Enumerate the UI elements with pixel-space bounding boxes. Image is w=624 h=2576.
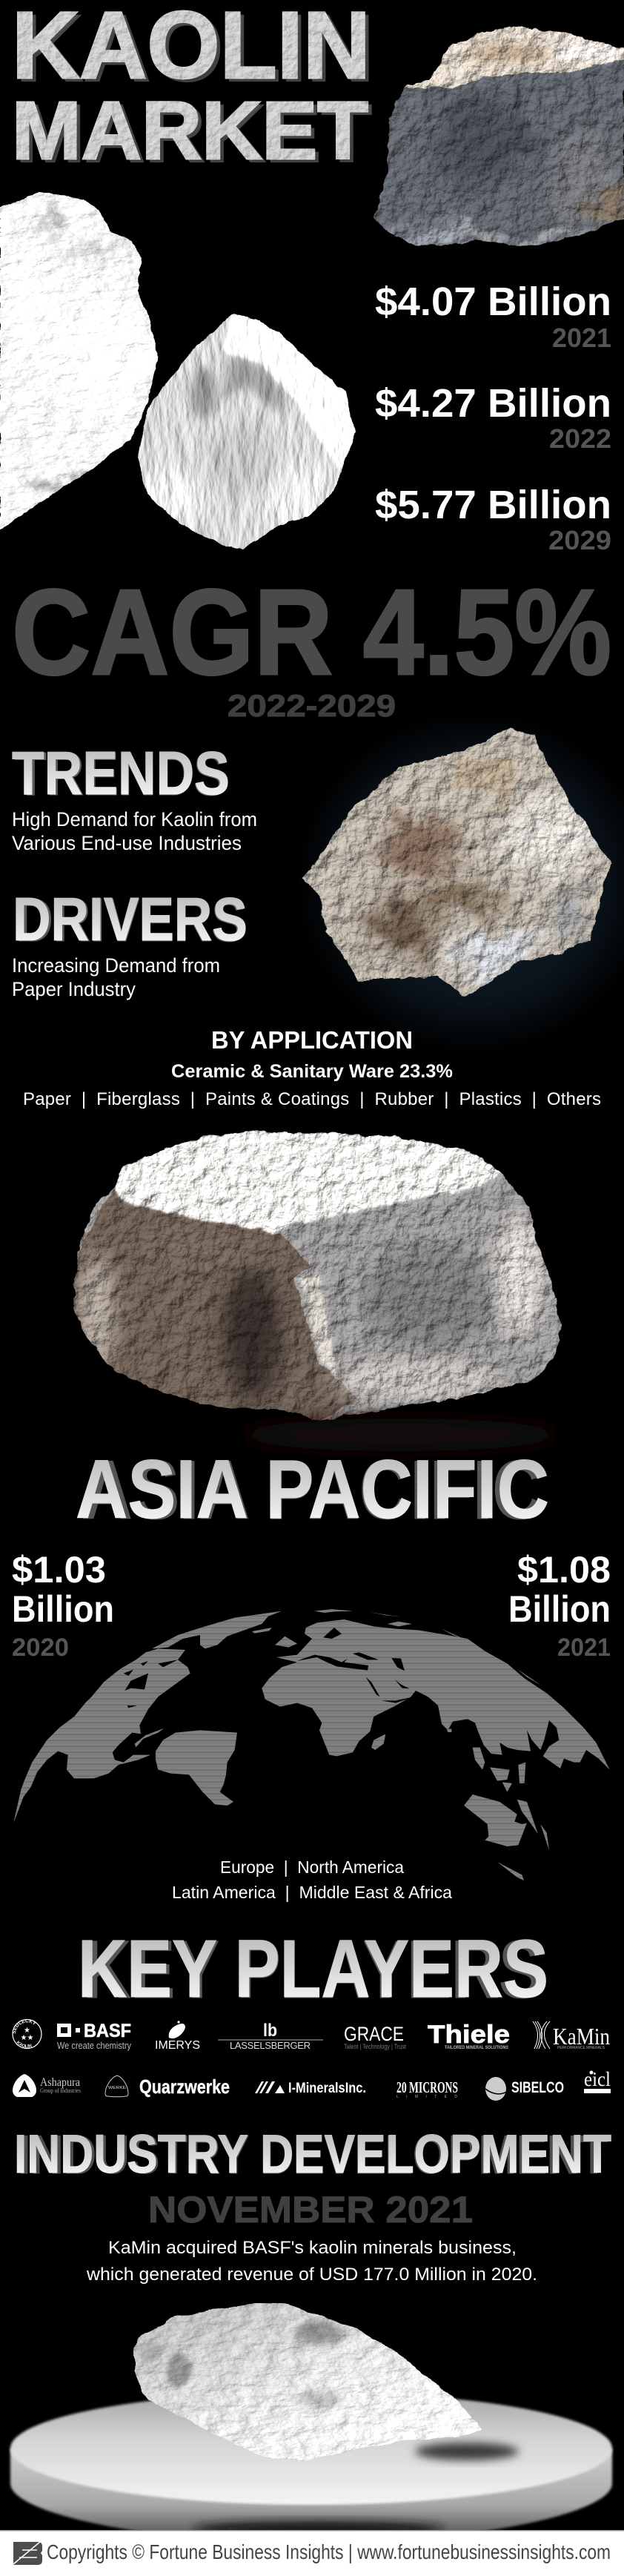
logo: Sedlecky Kaolin: [12, 2018, 42, 2050]
logo: Lasselsberger: [218, 2021, 323, 2051]
Madagascar: [371, 1734, 385, 1750]
drivers text: Increasing Demand from: [12, 954, 220, 977]
Eurasia and Africa: [262, 1619, 610, 1770]
panel: drivers: [12, 885, 248, 1000]
value 2021: [375, 280, 611, 353]
value 2029: 2029: [548, 525, 611, 555]
other regions: [172, 1857, 452, 1902]
panel: by application: [23, 1026, 601, 1109]
Iceland: [252, 1628, 272, 1634]
island chain: [480, 1770, 525, 1814]
image: plate pedestal: [10, 2392, 612, 2543]
image: large white chalk rock: [0, 189, 163, 538]
drivers heading: DRIVERS: [16, 885, 246, 954]
logo: Sedlecky Kaolin: KAOLIN: [16, 2041, 32, 2048]
logo: Ashapura: [13, 2074, 81, 2097]
logo: Quarzwerke: [105, 2075, 230, 2098]
drivers text: Paper Industry: [12, 978, 136, 1000]
region value 2021: 2021: [557, 1634, 611, 1662]
region value 2021: $1.08: [517, 1549, 611, 1591]
value 2029: $5.77 Billion: [375, 483, 611, 527]
other regions: Latin America | Middle East & Africa: [172, 1883, 452, 1902]
trends heading: TRENDS: [12, 739, 230, 808]
logo: Lasselsberger: LASSELSBERGER: [230, 2040, 311, 2051]
British Isles: [275, 1637, 297, 1648]
region heading: Asia Pacific: ASIA PACIFIC: [76, 1443, 549, 1536]
region value 2020: $1.03: [12, 1549, 106, 1591]
logo: 20 Microns: LIMITED: [396, 2095, 457, 2099]
application heading: BY APPLICATION: [211, 1026, 413, 1054]
map east: Eurasia, Africa and Australia: [262, 1609, 610, 1880]
Borneo: [490, 1767, 510, 1781]
value 2021: $4.07 Billion: [375, 280, 611, 324]
logo: I-Minerals: I-MineralsInc.: [288, 2081, 366, 2096]
logo: Sedlecky Kaolin: ★★: [21, 2034, 33, 2042]
South America: [156, 1730, 237, 1806]
logo: Grace: Talent | Technology | Trust: [344, 2043, 406, 2050]
region value 2020: 2020: [12, 1634, 69, 1662]
image: beige kaolin rock: [296, 723, 615, 1001]
logos: key players: [12, 2018, 611, 2101]
image: kaolin rock on pedestal: [133, 2303, 482, 2460]
value 2022: [375, 381, 611, 454]
logo: BASF: We create chemistry: [57, 2040, 131, 2051]
Greenland: [152, 1611, 282, 1648]
Sumatra: [473, 1748, 485, 1770]
value 2022: 2022: [549, 423, 611, 454]
drivers text: [12, 954, 220, 1000]
logo: 20 Microns: [396, 2078, 458, 2099]
development date: NOVEMBER 2021: [148, 2189, 473, 2230]
Sulawesi: [518, 1763, 525, 1783]
logo: Sedlecky Kaolin: SEDLECKY: [12, 2019, 37, 2034]
region value 2021: Billion: [508, 1588, 611, 1630]
logo: Ashapura: Group of Industries: [40, 2087, 81, 2094]
logo: KaMin: PERFORMANCE MINERALS: [557, 2046, 605, 2050]
development description: KaMin acquired BASF's kaolin minerals business,: [108, 2238, 517, 2258]
logo: Sibelco: SIBELCO: [511, 2079, 564, 2096]
trends text: Various End-use Industries: [12, 832, 242, 854]
logo: EICL: eicl: [584, 2068, 611, 2090]
logo: Lasselsberger: lb: [263, 2021, 277, 2041]
logo: KaMin: [533, 2021, 610, 2050]
title lettering: [12, 0, 371, 176]
logo: Grace: GRACE: [344, 2023, 404, 2045]
market values: [375, 280, 611, 555]
logo: Sibelco: [485, 2077, 564, 2101]
logo: Imerys: [155, 2021, 200, 2052]
Sri Lanka: [447, 1729, 451, 1732]
value 2022: $4.27 Billion: [375, 381, 611, 426]
other regions: Europe | North America: [220, 1857, 404, 1877]
CAGR period: 2022-2029: [228, 688, 396, 723]
logo: KaMin: KaMin: [553, 2023, 610, 2050]
region value 2020: [12, 1549, 114, 1662]
panel: trends: [12, 739, 257, 854]
logo: I-Minerals: [255, 2081, 366, 2096]
logo: Ashapura: Ashapura: [40, 2076, 80, 2089]
trends heading: TRENDS: [15, 739, 228, 808]
value 2029: [375, 483, 611, 555]
region heading: Asia Pacific: ASIA PACIFIC: [82, 1444, 543, 1536]
logo: 20 Microns: 20 MICRONS: [396, 2078, 458, 2096]
New Zealand: [497, 1862, 524, 1880]
Australia: [464, 1794, 527, 1846]
Arctic inlets: [124, 1659, 178, 1708]
image: dark kaolin rock: [371, 22, 624, 252]
title: Kaolin Market: [12, 0, 374, 179]
map west: Americas: [13, 1611, 282, 1823]
logo: Thiele: TAILORED MINERAL SOLUTIONS: [445, 2045, 509, 2050]
logo: Imerys: IMERYS: [155, 2039, 200, 2052]
world map globe: [13, 1609, 610, 1880]
image: white pointed rock: [133, 311, 356, 552]
development description: which generated revenue of USD 177.0 Million in 2020.: [86, 2265, 537, 2285]
Cuba and Caribbean: [135, 1728, 165, 1748]
trends text: High Demand for Kaolin from: [12, 808, 257, 830]
trends text: [12, 808, 257, 854]
North America: [13, 1648, 190, 1823]
region value 2021: [508, 1549, 611, 1662]
Hudson Bay: [125, 1674, 148, 1691]
development description: [86, 2238, 537, 2285]
leading segment: Ceramic & Sanitary Ware 23.3%: [171, 1061, 453, 1082]
drivers heading: DRIVERS: [13, 885, 248, 954]
logo: Quarzwerke: Quarzwerke: [139, 2075, 230, 2098]
logo: Sedlecky Kaolin: ★: [24, 2027, 30, 2035]
logo: BASF: [57, 2021, 131, 2051]
decoration: dust under block: [237, 1419, 563, 1451]
footer: [0, 2530, 624, 2576]
seas: Mediterranean, Black, Caspian, Red, Persian Gulf, Baltic: [297, 1628, 414, 1703]
image: large cut kaolin block: [67, 1127, 571, 1424]
icon: Fortune Business Insights logo: [13, 2542, 42, 2565]
title shadow: [16, 0, 374, 179]
New Guinea: [517, 1800, 538, 1834]
logo: BASF: BASF: [84, 2021, 131, 2041]
Arctic islands: [314, 1609, 542, 1685]
logo: Quarzwerke: WERKE: [108, 2086, 127, 2090]
title lettering: MARKET: [12, 85, 368, 176]
New Caledonia: [540, 1824, 549, 1850]
segment list: Paper | Fiberglass | Paints & Coatings | Rubber | Plastics | Others: [23, 1089, 601, 1109]
logo: Thiele: Thiele: [428, 2021, 510, 2049]
region value 2020: Billion: [12, 1588, 114, 1630]
value 2021: 2021: [552, 323, 611, 353]
title shadow: MARKET: [16, 88, 372, 179]
navy glow behind rock: [296, 712, 624, 1053]
